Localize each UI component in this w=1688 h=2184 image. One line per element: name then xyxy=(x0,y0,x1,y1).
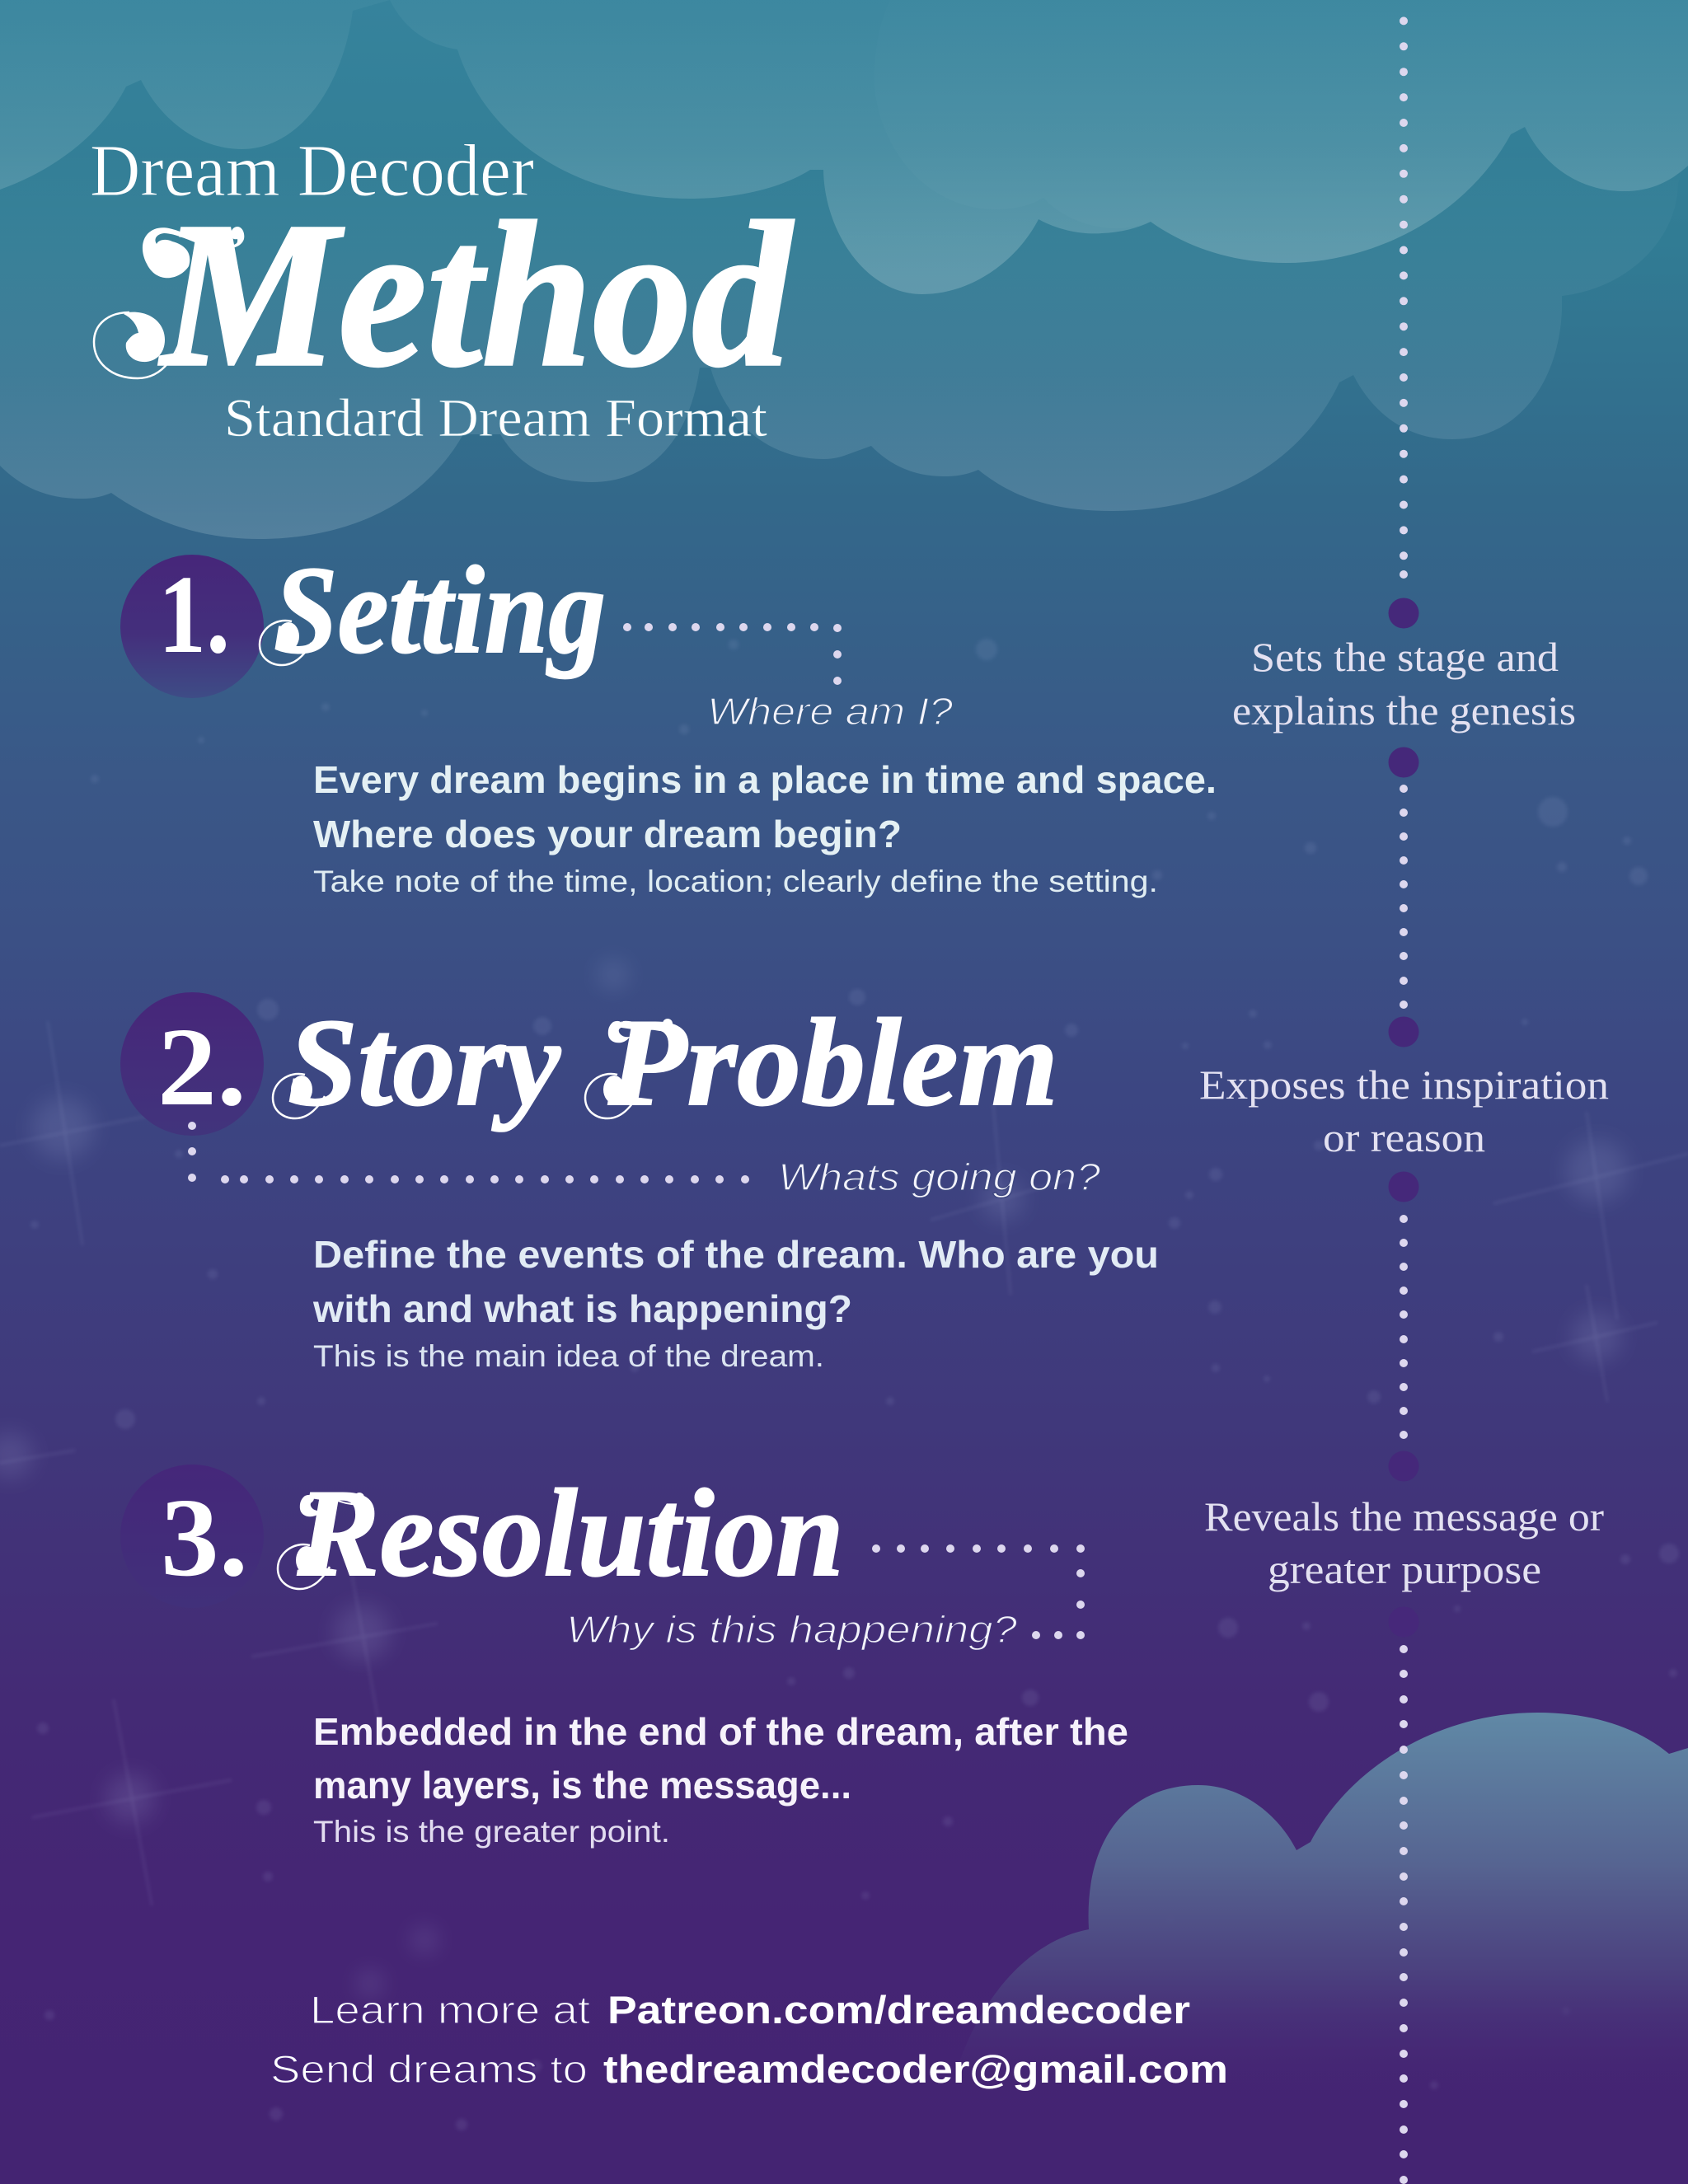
footer links: Send dreams to xyxy=(270,2047,588,2091)
title: Dream Decoder: Dream Decoder xyxy=(90,130,534,212)
subtitle: Standard Dream Format: Standard Dream Format xyxy=(224,388,767,448)
upper middle cloud xyxy=(390,0,1151,294)
vertical dotted timeline xyxy=(1400,16,1408,2184)
footer links: Patreon.com/dreamdecoder xyxy=(607,1988,1190,2032)
body text 2: with and what is happening? xyxy=(312,1287,852,1330)
body text 3: many layers, is the message... xyxy=(313,1764,851,1807)
bottom cloud xyxy=(948,1713,1688,2110)
connector dots 2 xyxy=(188,1122,749,1183)
lower cloud bank xyxy=(0,148,1688,539)
footer links: Learn more at xyxy=(310,1988,590,2032)
connector dots 1 xyxy=(623,623,842,685)
body text 3: Embedded in the end of the dream, after the xyxy=(313,1710,1128,1753)
section 3: Resolution xyxy=(120,1464,1604,1849)
background stars xyxy=(0,639,1688,2130)
body text 1 xyxy=(313,758,1217,898)
upper right cloud xyxy=(874,0,1688,263)
title: Method: Method xyxy=(158,179,795,410)
question 3: Why is this happening? xyxy=(566,1608,1017,1651)
footer links: thedreamdecoder@gmail.com xyxy=(603,2047,1228,2091)
body text 3 xyxy=(313,1710,1128,1849)
footer links xyxy=(270,1988,1228,2091)
step number 1: 1. xyxy=(158,553,230,677)
section 1: Setting xyxy=(120,541,1576,898)
number circle 3 xyxy=(120,1465,264,1608)
step number 3: 3. xyxy=(161,1476,248,1600)
side caption 2: Exposes the inspiration xyxy=(1199,1062,1609,1108)
side caption 3: greater purpose xyxy=(1268,1546,1541,1592)
number circle 1 xyxy=(120,555,264,698)
heading: Story Problem: Story xyxy=(288,993,561,1132)
body text 1: Every dream begins in a place in time and space. xyxy=(313,758,1217,801)
side caption 1: explains the genesis xyxy=(1232,687,1576,733)
question 1: Where am I? xyxy=(707,690,953,733)
upper left cloud xyxy=(0,0,390,190)
body text 2: This is the main idea of the dream. xyxy=(313,1339,824,1373)
connector dots 3 xyxy=(872,1544,1085,1639)
body text 2: Define the events of the dream. Who are you xyxy=(313,1233,1159,1276)
heading: Story Problem xyxy=(273,993,1058,1132)
body text 3: This is the greater point. xyxy=(313,1815,670,1849)
section 2: Story Problem xyxy=(120,992,1609,1373)
side caption 1: Sets the stage and xyxy=(1251,634,1559,680)
number circle 2 xyxy=(120,992,264,1136)
timeline nodes xyxy=(1388,598,1419,1637)
title block xyxy=(90,130,795,448)
side caption 2: or reason xyxy=(1323,1114,1485,1160)
body text 1: Take note of the time, location; clearly define the setting. xyxy=(313,865,1158,898)
question 2: Whats going on? xyxy=(778,1155,1100,1198)
heading: Resolution: Resolution xyxy=(297,1464,844,1602)
body text 2 xyxy=(312,1233,1159,1373)
heading: Setting: Setting xyxy=(274,541,606,679)
side caption 3: Reveals the message or xyxy=(1204,1493,1604,1540)
side caption 1 xyxy=(1232,634,1576,733)
heading: Story Problem: Problem xyxy=(607,993,1058,1132)
side caption 3 xyxy=(1204,1493,1604,1592)
body text 1: Where does your dream begin? xyxy=(313,813,902,855)
step number 2: 2. xyxy=(157,1005,246,1129)
side caption 2 xyxy=(1199,1062,1609,1160)
